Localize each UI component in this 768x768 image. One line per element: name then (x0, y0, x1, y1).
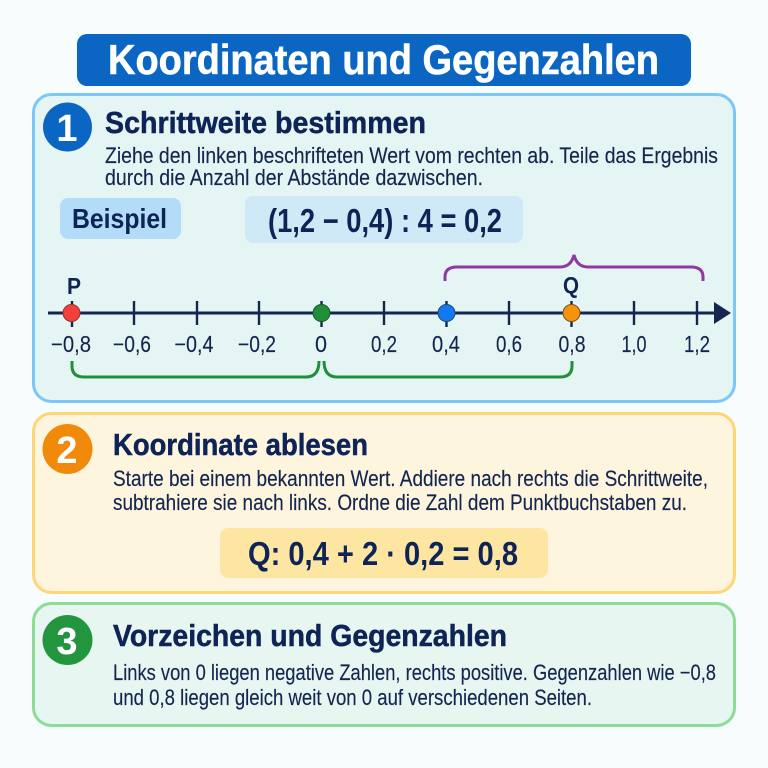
axis labels: 0,6 (496, 331, 522, 357)
green brace right (324, 361, 572, 377)
icon: step number 1 (43, 102, 92, 152)
axis labels: 1,0 (622, 331, 646, 357)
axis labels: 0,4 (432, 331, 460, 357)
formula: step size (245, 196, 523, 243)
panel: Koordinate ablesen (34, 414, 734, 592)
point at 0,4 (438, 304, 455, 322)
heading: Koordinate ablesen: Koordinate ablesen (113, 427, 368, 462)
icon: step number 2 (42, 424, 92, 474)
axis labels: −0,8 (51, 331, 91, 357)
heading: Schrittweite bestimmen: Schrittweite bestimmen (105, 105, 426, 140)
formula: step size: (1,2 − 0,4) : 4 = 0,2 (268, 202, 502, 239)
point P: P (67, 273, 81, 299)
text block: step description (105, 143, 718, 190)
axis labels: −0,6 (113, 331, 151, 357)
axis labels (51, 331, 710, 357)
text block: step description: und 0,8 liegen gleich weit von 0 auf verschiedenen Seiten. (113, 685, 592, 710)
point Q: Q (563, 272, 579, 298)
purple brace (445, 255, 703, 281)
point Q (563, 272, 580, 322)
panel: Schrittweite bestimmen (34, 94, 734, 402)
title banner: Koordinaten und Gegenzahlen (108, 36, 659, 83)
label: Beispiel: Beispiel (72, 203, 167, 234)
icon: step number 3: 3 (56, 621, 78, 663)
axis line with arrow (48, 302, 731, 324)
panel: Vorzeichen und Gegenzahlen (34, 604, 734, 726)
heading: Vorzeichen und Gegenzahlen: Vorzeichen und Gegenzahlen (113, 618, 507, 653)
axis labels: 0,8 (558, 331, 586, 357)
text block: step description: durch die Anzahl der Abstände dazwischen. (105, 165, 483, 190)
point at zero (313, 304, 330, 322)
label: Beispiel (60, 198, 181, 239)
axis labels: 0 (315, 331, 327, 357)
icon: step number 3 (42, 615, 92, 665)
icon: step number 2: 2 (56, 430, 78, 472)
text block: step description (113, 660, 716, 710)
green brace left (72, 361, 319, 377)
chart: number line (48, 255, 731, 377)
text block: step description (113, 466, 708, 515)
axis labels: 0,2 (371, 331, 397, 357)
axis labels: 1,2 (684, 331, 710, 357)
text block: step description: subtrahiere sie nach links. Ordne die Zahl dem Punktbuchstaben zu. (113, 490, 687, 515)
icon: step number 1: 1 (56, 108, 78, 150)
axis labels: −0,4 (174, 331, 214, 357)
tick marks (72, 301, 697, 327)
point P (63, 273, 81, 322)
axis labels: −0,2 (238, 331, 276, 357)
formula: Q coordinate: Q: 0,4 + 2 · 0,2 = 0,8 (248, 535, 518, 572)
formula: Q coordinate (220, 528, 548, 578)
